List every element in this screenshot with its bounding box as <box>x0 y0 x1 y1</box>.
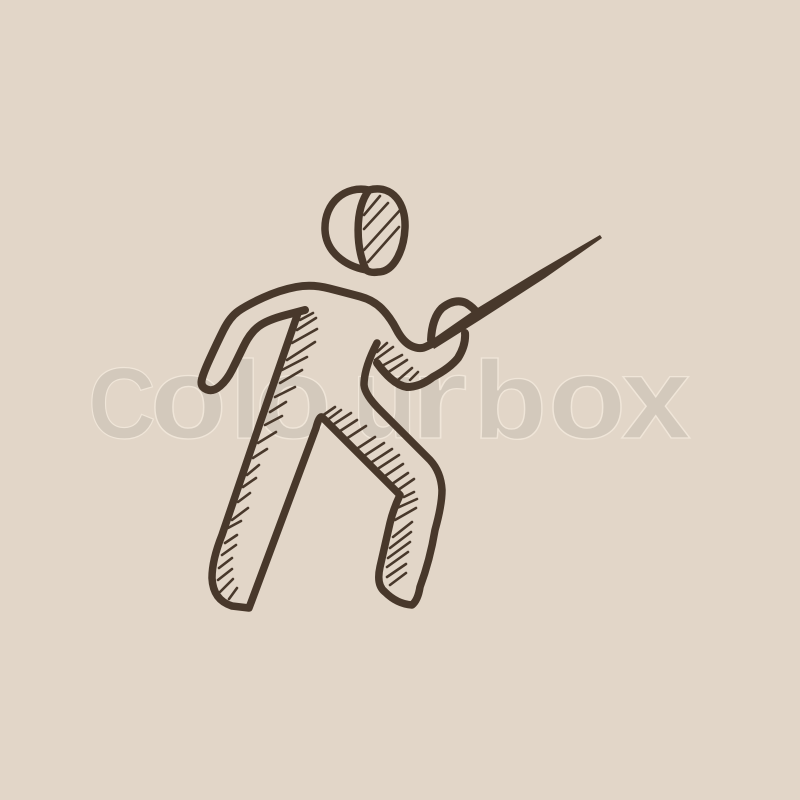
watermark: Colourbox <box>88 332 691 463</box>
sword guard <box>431 301 477 340</box>
icon: fencing mask head <box>325 189 405 272</box>
sword arm <box>377 333 465 387</box>
watermark: Colourbox: l <box>230 338 261 462</box>
watermark: Colourbox: b <box>473 338 547 462</box>
hatching: sword arm <box>375 343 418 380</box>
hatching: lower right leg <box>387 499 417 585</box>
fencer figure <box>201 189 602 608</box>
body outline: arm and shoulders <box>201 286 436 390</box>
hatching: thigh <box>322 407 414 497</box>
watermark: Colourbox: o <box>150 332 227 463</box>
watermark: Colourbox: r <box>410 334 468 463</box>
body outline: legs <box>212 313 442 608</box>
watermark: Colourbox: u <box>352 333 417 463</box>
watermark: Colourbox: o <box>548 332 626 463</box>
watermark: Colourbox: x <box>621 332 691 463</box>
watermark: Colourbox: o <box>255 332 332 463</box>
hatching: torso and left leg <box>218 313 317 599</box>
sword blade <box>430 235 602 349</box>
watermark: Colourbox: C <box>88 347 156 460</box>
